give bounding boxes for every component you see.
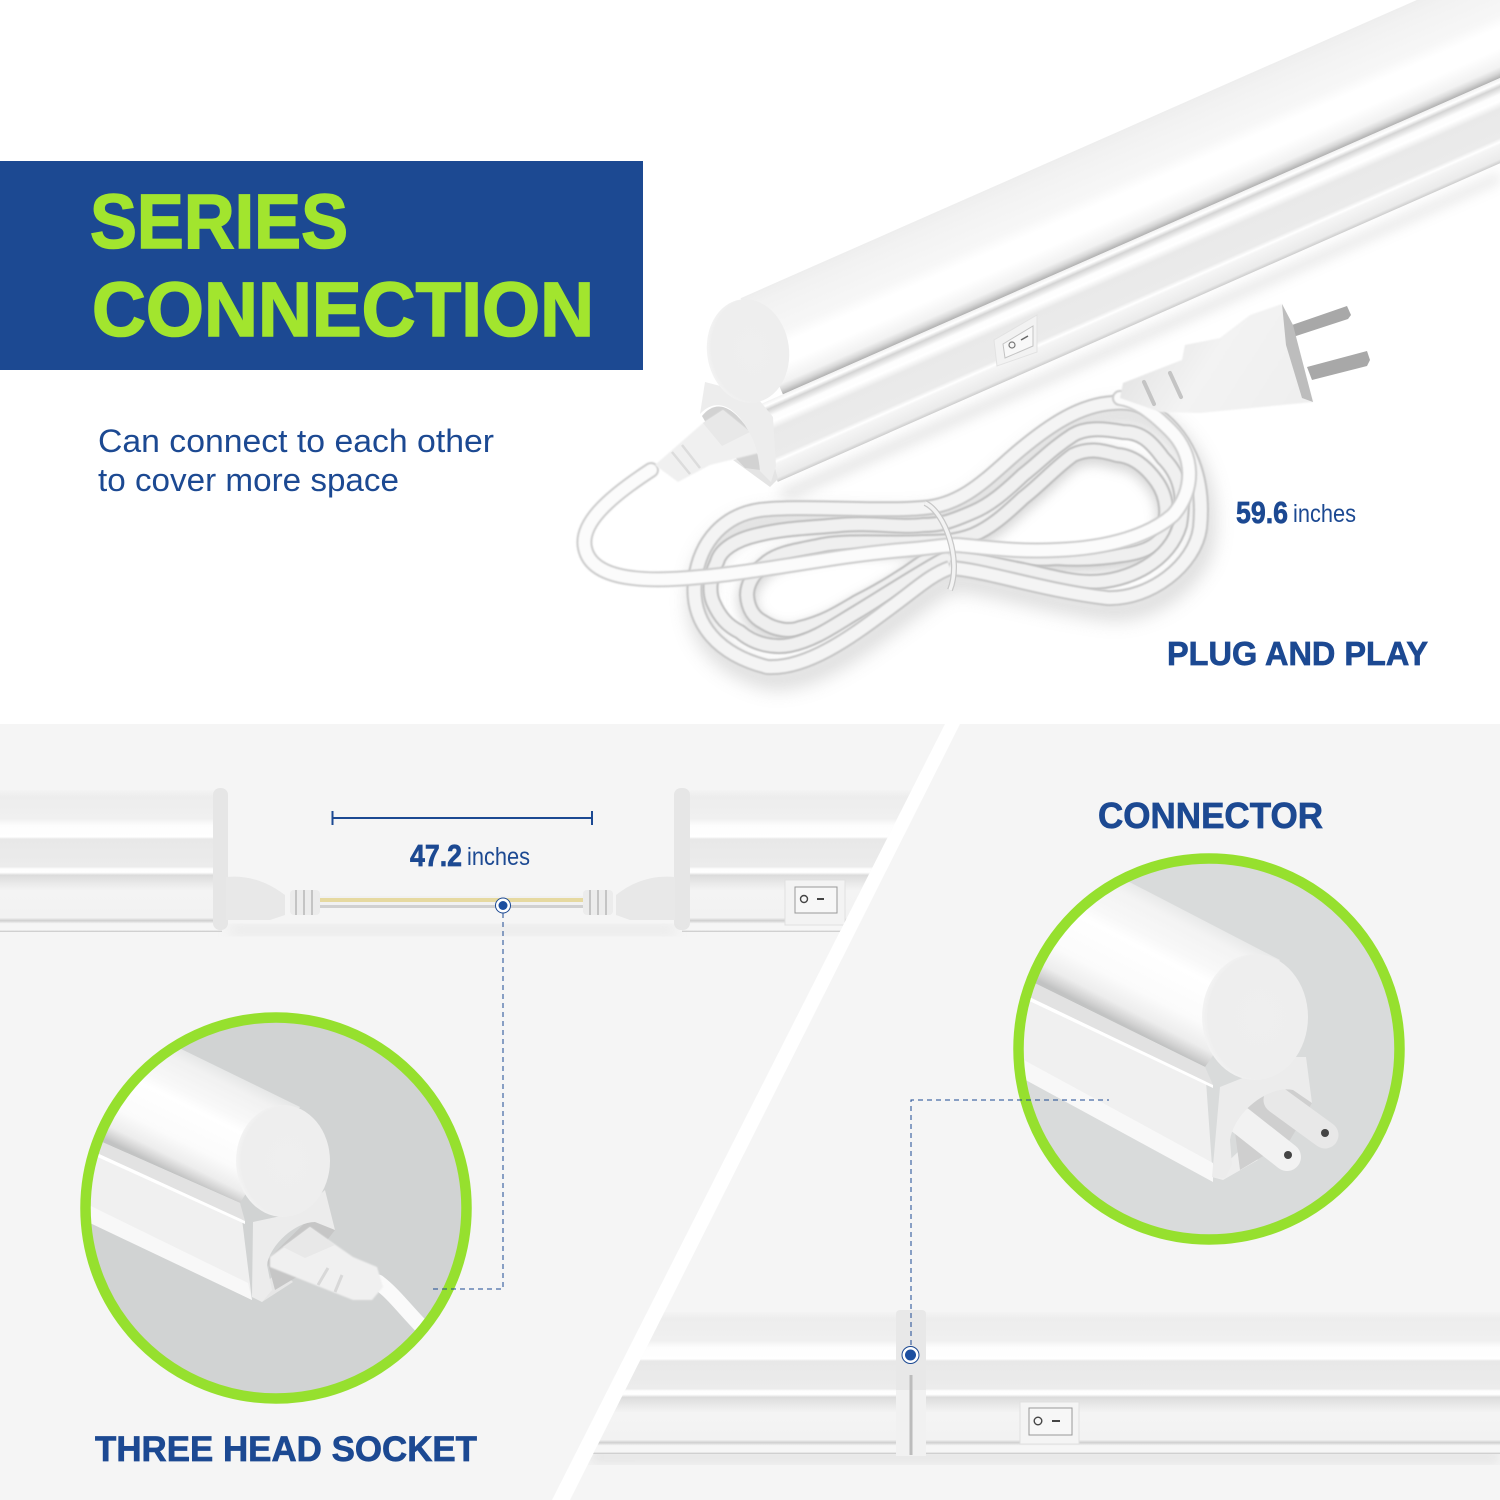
heading: connector: CONNECTOR [1098, 795, 1323, 836]
end cap [1202, 954, 1308, 1080]
left tube section [0, 788, 228, 932]
rail base [1213, 1152, 1258, 1180]
title [90, 179, 594, 353]
tube [1036, 882, 1280, 1067]
socket plug [270, 1227, 425, 1330]
socket opening [702, 406, 760, 470]
end cap [236, 1105, 330, 1217]
heading: three head socket: THREE HEAD SOCKET [95, 1430, 477, 1469]
dimension line [332, 811, 592, 825]
title: CONNECTION [92, 267, 594, 353]
rail base [262, 1278, 293, 1302]
socket opening [267, 1218, 335, 1290]
callout circle: three head socket [80, 1012, 472, 1404]
dashed leader: connector [911, 1100, 1109, 1345]
right tube section [674, 788, 893, 932]
cable length label: 47.2 [410, 838, 462, 873]
rail [1024, 988, 1212, 1162]
rail bracket [700, 382, 776, 482]
lower section background [0, 724, 1500, 1500]
title: SERIES [90, 179, 348, 265]
description text: Can connect to each other [98, 423, 494, 459]
dashed leader: cable to socket [429, 913, 503, 1289]
bottom tube [560, 1310, 1500, 1462]
diagonal divider [552, 724, 960, 1500]
rail base [733, 450, 778, 487]
cord length label: 59.6 [1236, 495, 1288, 530]
socket opening [1236, 1090, 1312, 1170]
heading: plug and play: PLUG AND PLAY [1167, 635, 1428, 672]
rail [90, 1142, 252, 1300]
cable length label: inches [467, 843, 530, 871]
rocker switch [1020, 1402, 1079, 1444]
product photo: LED tube with cord and plug [584, 0, 1500, 679]
tube drop shadow [775, 172, 1500, 500]
cable length label [410, 838, 530, 873]
marker dot on connector [902, 1346, 919, 1364]
power plug [1120, 304, 1370, 413]
power cord coil [584, 398, 1205, 679]
center connector clip [896, 1310, 926, 1456]
tube body [704, 0, 1500, 482]
title banner [0, 161, 643, 370]
end cap [700, 294, 796, 408]
cord length label: inches [1293, 500, 1356, 528]
tube [103, 1049, 300, 1199]
connector prongs [1240, 1100, 1329, 1159]
shadow [590, 1452, 1500, 1462]
rocker switch [994, 315, 1037, 366]
bracket [252, 1190, 335, 1302]
rocker switch [785, 880, 845, 925]
bracket [1212, 1057, 1312, 1178]
cord length label [1236, 495, 1356, 530]
connecting cable [226, 877, 675, 934]
cable tie [925, 503, 954, 590]
marker dot on cable [496, 898, 510, 913]
callout circle: connector [1000, 815, 1400, 1240]
description text: to cover more space [98, 462, 399, 498]
socket plug [655, 410, 763, 482]
description text [98, 423, 494, 498]
